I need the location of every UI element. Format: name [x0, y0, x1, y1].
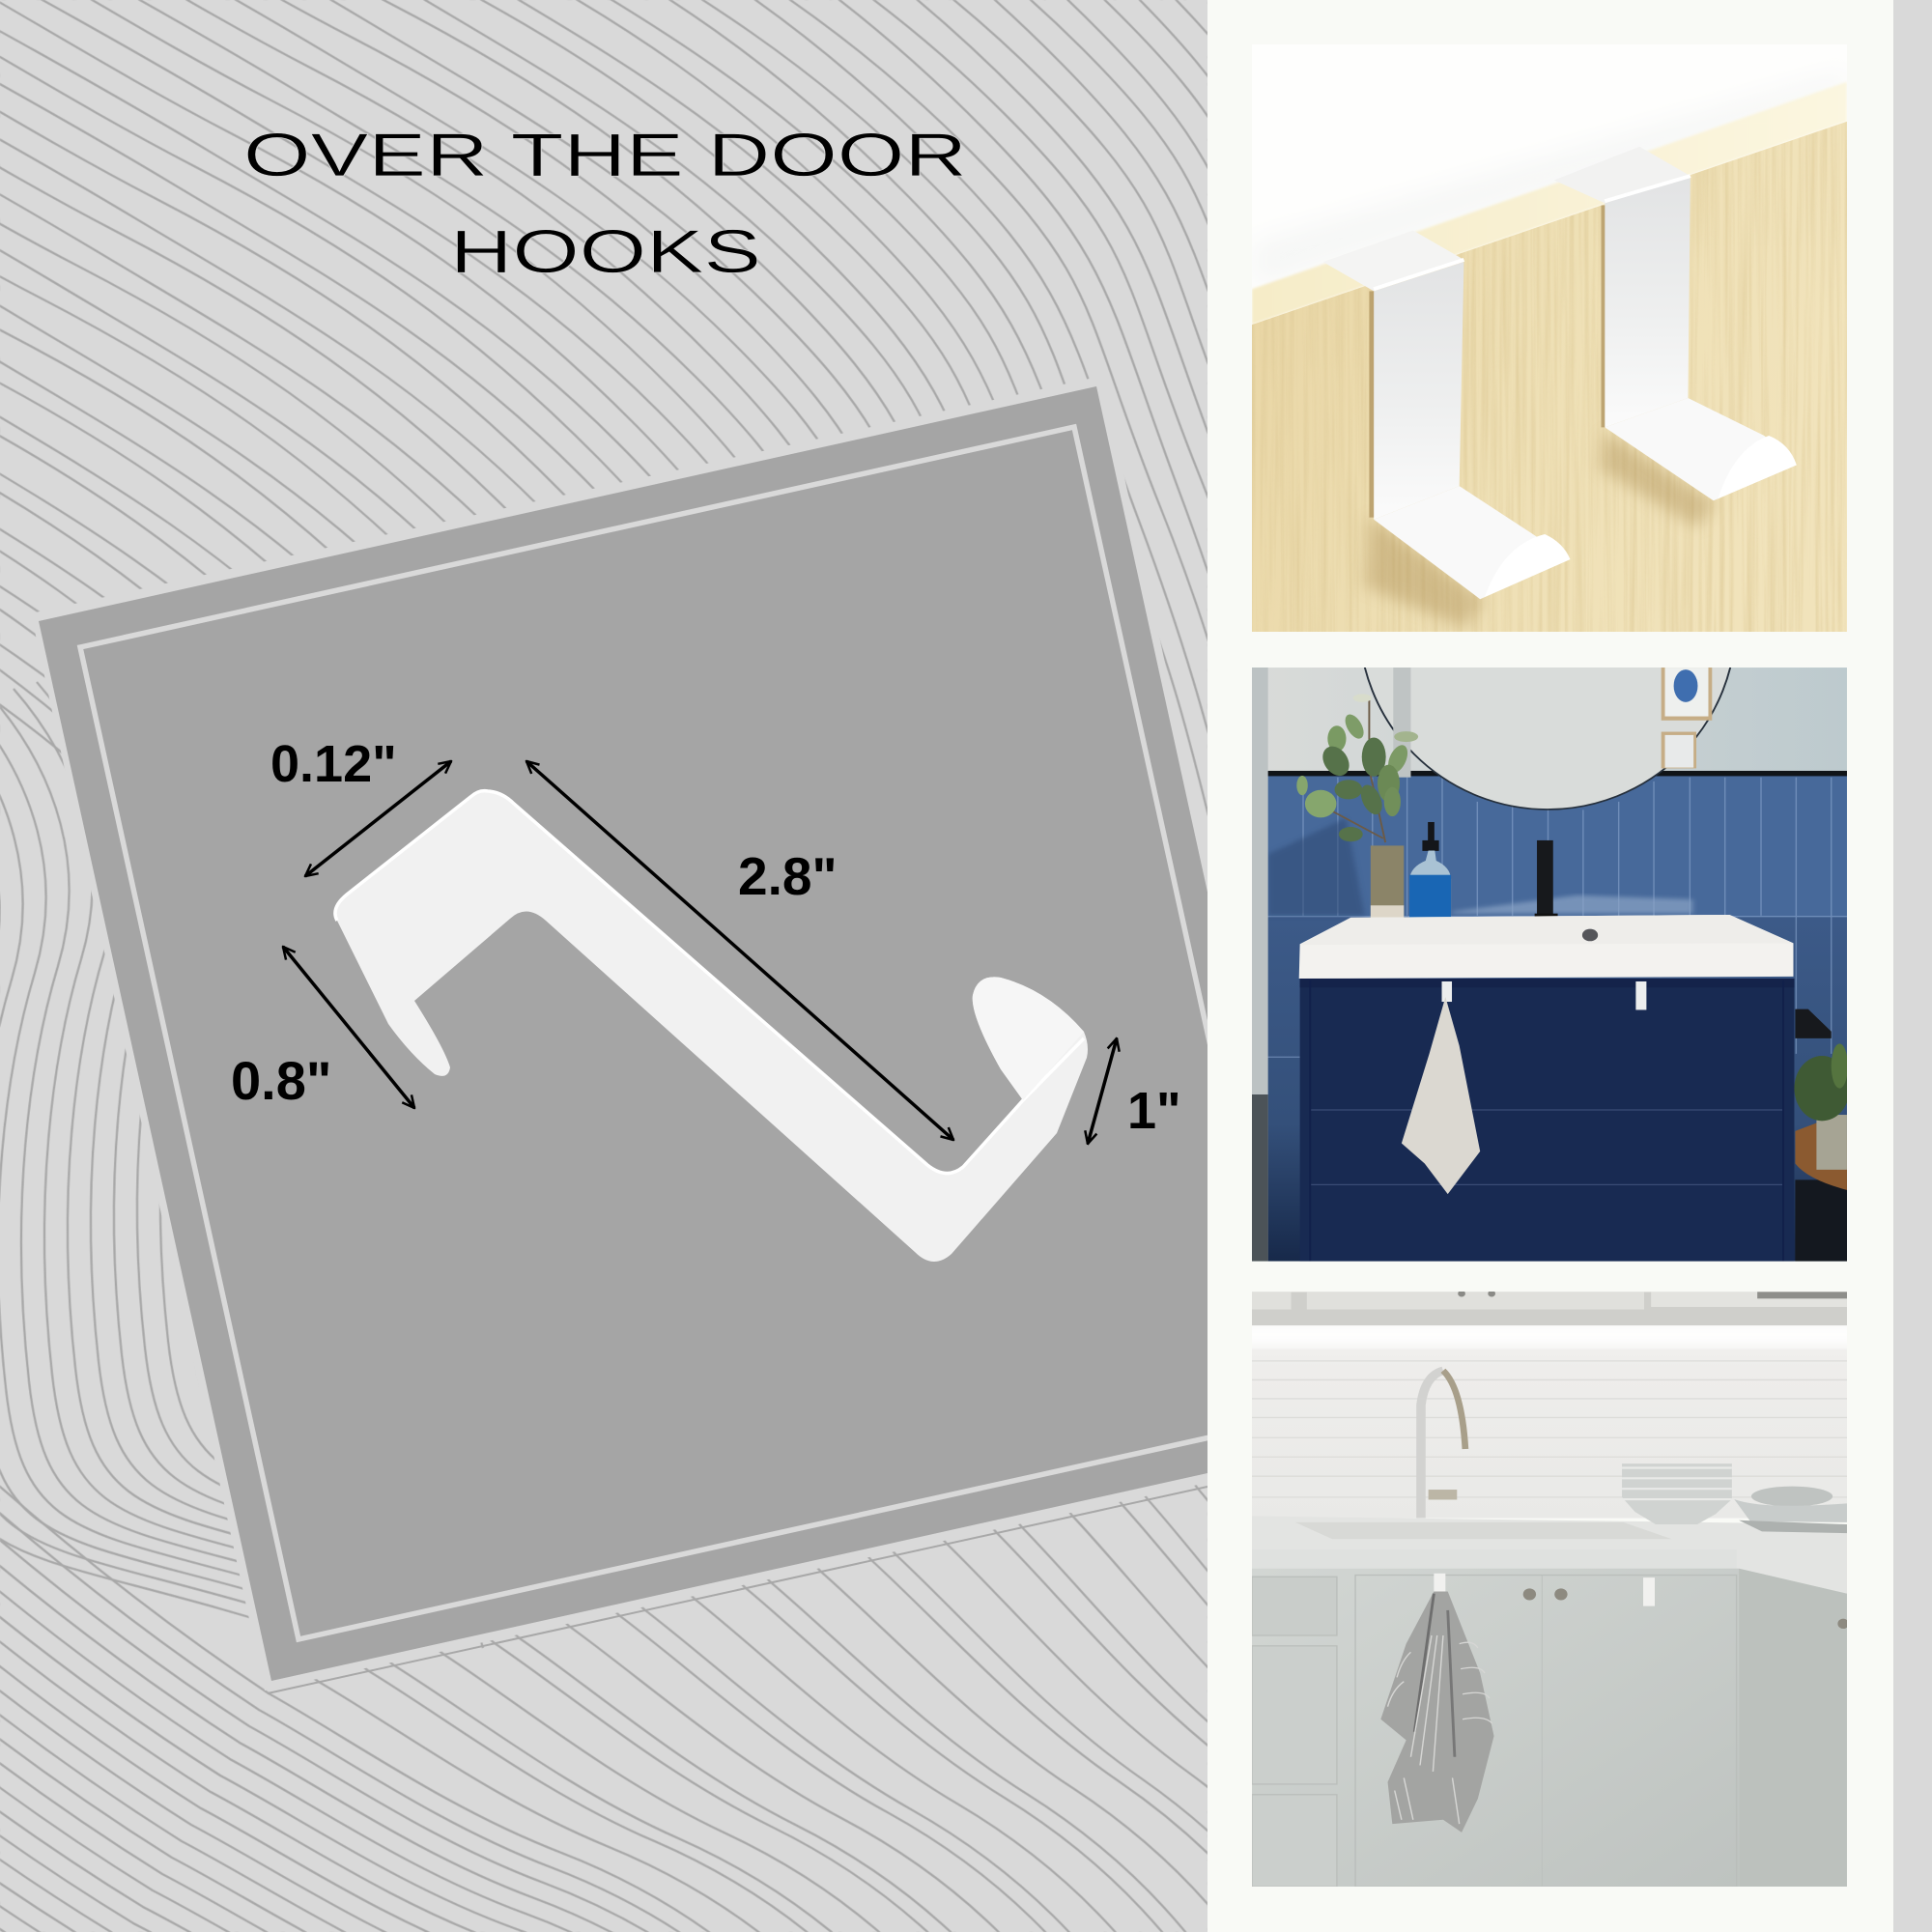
vanity cabinet: [1300, 979, 1794, 1262]
plant: [1296, 694, 1418, 842]
tea towel: [1380, 1591, 1494, 1833]
subway tile backsplash: [1252, 1349, 1847, 1519]
left hook: [1323, 231, 1570, 599]
dimension label 0.8: 0.8": [231, 1050, 331, 1111]
sink: [1299, 915, 1793, 979]
dimension arrow: 2.8 inch: [526, 761, 953, 1140]
faucet: [1535, 840, 1558, 920]
cast shadows: [1365, 432, 1716, 629]
dimension arrow: 0.12 inch: [305, 761, 451, 876]
over-door hooks: [1434, 1574, 1655, 1606]
photo: hooks on wooden door: [1252, 44, 1847, 632]
plates: [1734, 1487, 1847, 1533]
dimension label 1: 1": [1127, 1082, 1181, 1140]
lower cabinets: [1252, 1569, 1849, 1887]
title: OVER THE DOOR: [243, 122, 967, 189]
photo: white kitchen with towel: [1236, 1291, 1863, 1887]
right hook: [1554, 147, 1797, 500]
photo: bathroom vanity with towel: [1252, 668, 1847, 1262]
wall: [1252, 668, 1847, 773]
title: HOOKS: [450, 218, 761, 286]
dimension arrow: 0.8 inch: [283, 947, 414, 1108]
panel: rotated product dimensions card: [35, 379, 1208, 1694]
card light border: [35, 379, 1196, 1690]
card bottom outline: [268, 1487, 1208, 1693]
dimension label 2.8: 2.8": [738, 846, 838, 906]
right side plant and table: [1794, 1009, 1850, 1262]
soap bottle: [1409, 822, 1451, 920]
dimension label 0.12: 0.12": [270, 735, 397, 793]
blue tiles: [1267, 776, 1847, 1262]
right white column: [1208, 0, 1893, 1932]
round mirror: [1364, 668, 1731, 810]
stacked bowls: [1622, 1463, 1732, 1524]
card gray face: [39, 386, 1329, 1681]
over-door hooks on cabinet: [1441, 981, 1646, 1009]
countertop: [1252, 1516, 1847, 1594]
card inner frame: [80, 427, 1293, 1639]
product hook: [335, 791, 1088, 1262]
dimension arrow: 1 inch: [1088, 1038, 1117, 1144]
left wall strip: [1252, 668, 1268, 1262]
title: [243, 122, 967, 286]
right edge gray strip: [1893, 0, 1932, 1932]
hand towel: [1402, 997, 1480, 1194]
upper cabinets: [1252, 1291, 1847, 1325]
faucet: [1421, 1371, 1465, 1519]
black tile trim: [1267, 771, 1847, 776]
vase: [1371, 845, 1404, 920]
